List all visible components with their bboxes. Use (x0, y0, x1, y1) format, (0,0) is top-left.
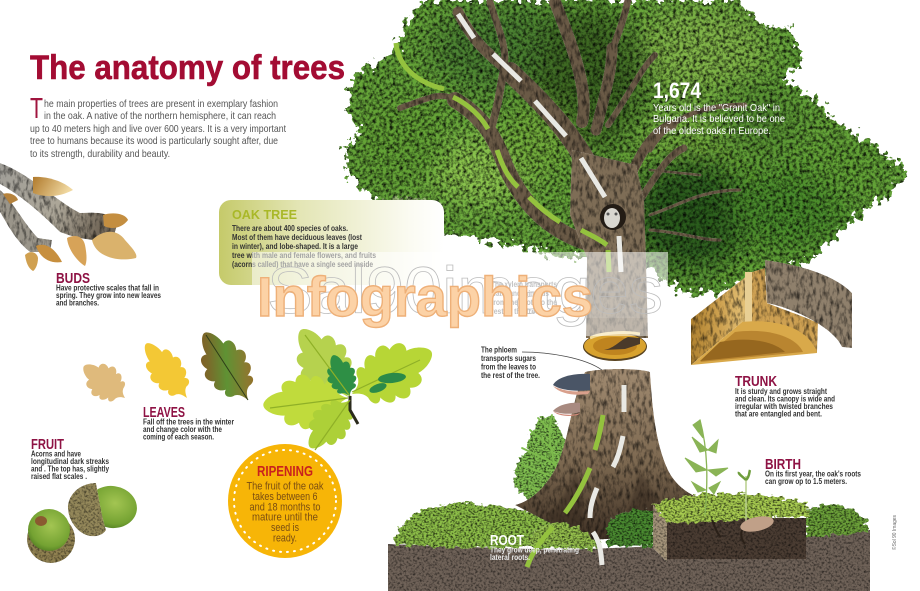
left moss (394, 502, 600, 549)
leaves label: Fall off the trees in the winter (143, 418, 234, 426)
1,674 callout: Years old is the "Granit Oak" in (653, 103, 780, 114)
white phloem arrows (458, 14, 624, 565)
intro paragraph: he main properties of trees are present in exemplary fashion (44, 99, 278, 110)
fruit label: raised flat scales . (31, 472, 87, 481)
phloem callout: from the leaves to (481, 362, 536, 372)
cut soil block (653, 505, 806, 562)
birth label: BIRTH (765, 457, 801, 473)
oak tree description (232, 224, 377, 269)
phloem callout: The phloem (481, 346, 517, 354)
1,674 callout (653, 78, 785, 137)
ripening heading: RIPENING (257, 464, 313, 480)
fruit label: longitudinal dark streaks (31, 457, 110, 466)
ripening text: The fruit of the oak (246, 480, 324, 492)
fern (515, 415, 572, 506)
title: The anatomy of trees (30, 49, 345, 87)
birth label: can grow op to 1.5 meters. (765, 477, 847, 486)
big green oak leaf spray (261, 315, 445, 460)
xylem text: rest of the tree. (491, 307, 541, 316)
trunk label (735, 374, 835, 418)
phloem callout: transports sugars (481, 354, 537, 363)
ripening badge (228, 444, 342, 558)
trunk label: TRUNK (735, 374, 777, 390)
buds label: BUDS (56, 271, 90, 287)
1,674 callout: Bulgaria. It is believed to be one (653, 114, 785, 125)
xylem text (490, 280, 558, 316)
fruit label: Acorns and have (31, 450, 82, 458)
ripening text: seed is (271, 522, 299, 534)
leaves label: and change color with the (143, 425, 223, 434)
phloem callout (481, 346, 602, 380)
oak tree description: in winter), and lobe-shaped. It is a large (232, 242, 359, 251)
stump shadow folds (545, 470, 661, 528)
root label (490, 533, 579, 562)
buds label: Have protective scales that fall in (56, 284, 159, 292)
fruit label: and . The top has, slightly (31, 464, 110, 474)
intro paragraph: in the oak. A native of the northern hemisphere, it can reach (44, 111, 276, 122)
acorns (27, 483, 140, 563)
seedling moss (652, 493, 808, 524)
pale tree reflection over oak box (369, 197, 441, 233)
watermark outline text: Sal90images (267, 253, 663, 327)
root label: ROOT (490, 533, 524, 549)
trunk label: It is sturdy and grows straight (735, 387, 827, 396)
ripening text: mature until the (252, 512, 318, 524)
ripening text (246, 480, 324, 544)
buds branch illustration (0, 163, 136, 271)
oak tree description: Most of them have deciduous leaves (lost (232, 233, 362, 242)
three autumn leaves (73, 320, 267, 413)
seedling plant (685, 420, 728, 515)
image credit: ©Sol 90 Images (891, 515, 898, 550)
green xylem arrows (396, 43, 609, 567)
root label: They grow deep, penetrating (490, 546, 579, 554)
ground soil (388, 530, 870, 591)
shelf mushrooms (553, 374, 590, 416)
intro paragraph: tree to humans because its wood is particularly sought after, due (30, 136, 278, 147)
root label: lateral roots. (490, 553, 530, 562)
oak tree heading: OAK TREE (232, 207, 297, 222)
lower trunk veil (584, 318, 650, 336)
tree branches (400, 0, 745, 246)
leaves label: LEAVES (143, 405, 185, 421)
intro paragraph: T (30, 93, 43, 125)
owl in tree hole (600, 204, 626, 230)
right moss (806, 505, 868, 538)
trunk section illustration (691, 260, 852, 365)
oak tree description: (acorns called) that have a single seed inside (232, 260, 374, 269)
wood cross-section ring (583, 332, 647, 361)
fruit label: FRUIT (31, 437, 64, 453)
leaves label (143, 405, 234, 442)
oak tree description: There are about 400 species of oaks. (232, 224, 348, 233)
trunk label: and clean. Its canopy is wide and (735, 394, 835, 404)
trunk label: irregular with twisted branches (735, 402, 834, 411)
tree stump (515, 369, 698, 540)
intro paragraph: to its strength, durability and beauty. (30, 149, 170, 160)
intro paragraph: up to 40 meters high and live over 600 years. It is a very important (30, 124, 286, 135)
phloem callout: the rest of the tree. (481, 371, 540, 380)
leaves label: coming of each season. (143, 432, 214, 442)
intro paragraph (30, 93, 286, 160)
upper trunk (570, 150, 648, 338)
fruit label (31, 437, 110, 481)
birth label (765, 457, 862, 486)
moss front clump (608, 510, 655, 547)
watermark veil (252, 252, 668, 318)
xylem text: from the roots to the (491, 298, 558, 307)
watermark infographics text: Infographics (257, 265, 593, 328)
oak tree panel (219, 200, 444, 285)
trunk label: that are entangled and bent. (735, 410, 822, 418)
sprout and seed (712, 470, 775, 544)
xylem text: The xylem transports (491, 280, 558, 289)
buds label: and branches. (56, 298, 99, 308)
ripening text: and 18 months to (250, 502, 320, 514)
moss clump over root (528, 523, 600, 548)
ripening text: takes between 6 (252, 491, 318, 503)
ripening text: ready. (273, 532, 297, 544)
1,674 callout: of the oldest oaks in Europe. (653, 126, 771, 137)
birth label: On its first year, the oak's roots (765, 470, 862, 478)
tree canopy foliage (330, 0, 920, 310)
xylem text: water and minerals (490, 289, 550, 298)
buds label: spring. They grow into new leaves (56, 291, 162, 300)
1,674 callout: 1,674 (653, 78, 702, 103)
buds label (56, 271, 162, 308)
oak tree description: tree with male and female flowers, and fruits (232, 251, 377, 260)
